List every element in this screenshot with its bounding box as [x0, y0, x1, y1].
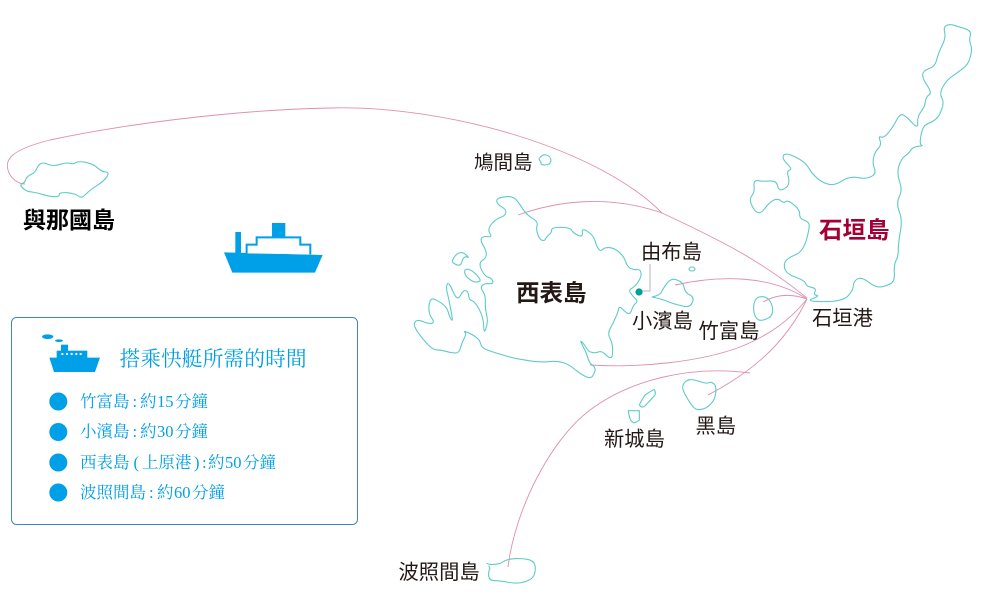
island: Taketomi: [754, 297, 773, 320]
legend row: Iriomote: (: [134, 453, 139, 472]
legend row: Iriomote: 西表島: [80, 453, 130, 472]
legend row: Iriomote: :: [202, 453, 207, 472]
legend row: Taketomi: 分鐘: [175, 392, 208, 411]
label: Kohama: 小濱島: [632, 310, 693, 333]
island: Hateruma: [487, 559, 535, 583]
legend row: Kohama: 小濱島: [80, 422, 130, 441]
island: Iriomote: [414, 197, 641, 378]
routes: [7, 108, 807, 567]
legend row: Kohama: 約: [140, 422, 156, 441]
legend row: Iriomote: 分鐘: [243, 453, 276, 472]
legend row: Iriomote: 50: [225, 453, 242, 472]
legend row: Taketomi: [49, 391, 208, 411]
label: Hateruma: 波照間島: [398, 561, 480, 584]
legend row: Kohama: :: [132, 422, 137, 441]
legend row: Taketomi: :: [132, 392, 137, 411]
legend row: Hateruma: 60: [174, 483, 190, 502]
legend row: Kohama: 30: [157, 422, 174, 441]
island: Aragusuku: [628, 389, 655, 423]
legend row: Hateruma: 分鐘: [192, 483, 225, 502]
label: Yubu: 由布島: [641, 241, 702, 264]
legend row: Kohama: 分鐘: [175, 422, 208, 441]
legend row: Hateruma: 波照間島: [80, 483, 146, 502]
island: Yonaguni: [21, 162, 108, 197]
legend row: Iriomote: 上原港: [142, 453, 192, 472]
legend row: Taketomi: 約: [140, 392, 156, 411]
island: Kohama: [652, 279, 693, 307]
panel: legend: [12, 318, 358, 524]
island: Ishigaki: [750, 25, 972, 302]
island: Yubu: [689, 267, 695, 271]
icon: large ferry: [224, 223, 323, 273]
label: Taketomi: 竹富島: [698, 320, 759, 343]
label: Ishigaki port: 石垣港: [812, 307, 873, 330]
label: Yonaguni: 與那國島: [23, 207, 115, 233]
legend row: Hateruma: :: [149, 483, 154, 502]
legend title: 搭乘快艇所需的時間: [120, 348, 307, 371]
label: Hatoma: 鳩間島: [474, 152, 533, 174]
legend row: Taketomi: 15: [157, 392, 174, 411]
marker: Yubu leader: [635, 264, 650, 296]
legend row: Iriomote: [49, 453, 276, 472]
legend row: Hateruma: [49, 483, 225, 502]
island: Kuroshima: [683, 380, 716, 410]
legend row: Kohama: [49, 422, 208, 441]
legend row: Taketomi: 竹富島: [80, 392, 130, 411]
label: Aragusuku: 新城島: [604, 428, 665, 451]
label: Kuroshima: 黑島: [696, 415, 736, 438]
icon: small ferry: [42, 334, 100, 372]
island: Hatoma: [539, 155, 551, 165]
legend row: Iriomote: 約: [208, 453, 224, 472]
legend row: Iriomote: ): [194, 453, 200, 472]
legend row: Hateruma: 約: [157, 483, 174, 502]
label: Ishigaki: 石垣島: [819, 217, 890, 243]
label: Iriomote: 西表島: [516, 280, 586, 306]
